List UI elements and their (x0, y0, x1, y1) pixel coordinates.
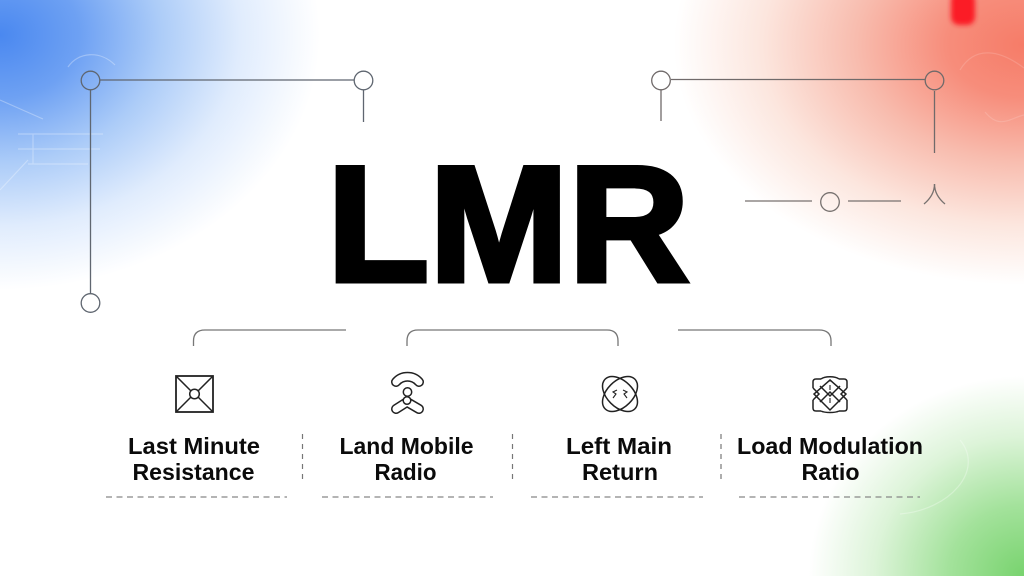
title: LMR: LMR (327, 133, 689, 317)
red blob accent (951, 0, 975, 25)
icon: orbital rings (596, 370, 644, 418)
faint decorative marks: blue corner (0, 55, 115, 190)
connector: top-left frame (81, 71, 373, 312)
label: Last Minute Resistance (128, 433, 260, 485)
label: Last Minute Resistance: Resistance (132, 459, 254, 485)
icon: radio waves and person (396, 377, 419, 409)
label: Left Main Return: Return (582, 459, 658, 485)
icon: square with crossing diagonals (176, 376, 213, 412)
bracket: Land Mobile Radio to Left Main Return (407, 330, 618, 346)
background: blue gradient (0, 0, 350, 310)
faint decorative marks: green corner (900, 440, 968, 514)
connector: side node with branch (745, 184, 945, 211)
label: Last Minute Resistance: Last Minute (128, 433, 260, 459)
label: Left Main Return (566, 433, 672, 485)
background: red gradient (650, 0, 1024, 305)
label: Left Main Return: Left Main (566, 433, 672, 459)
bracket: Last Minute Resistance (194, 330, 346, 346)
icon: ornate diamond knot (813, 377, 847, 412)
label: Land Mobile Radio (340, 433, 474, 485)
background: green gradient (805, 372, 1024, 576)
label: Load Modulation Ratio: Load Modulation (737, 433, 923, 459)
label: Load Modulation Ratio (737, 433, 923, 485)
connector: top-right frame (652, 71, 944, 153)
label: Land Mobile Radio: Radio (374, 459, 436, 485)
bracket: Load Modulation Ratio (678, 330, 831, 346)
vertical dashed dividers (302, 434, 721, 484)
label: Land Mobile Radio: Land Mobile (340, 433, 474, 459)
faint decorative marks: red corner (960, 53, 1024, 122)
label: Load Modulation Ratio: Ratio (802, 459, 860, 485)
horizontal dashed underlines (106, 496, 920, 498)
